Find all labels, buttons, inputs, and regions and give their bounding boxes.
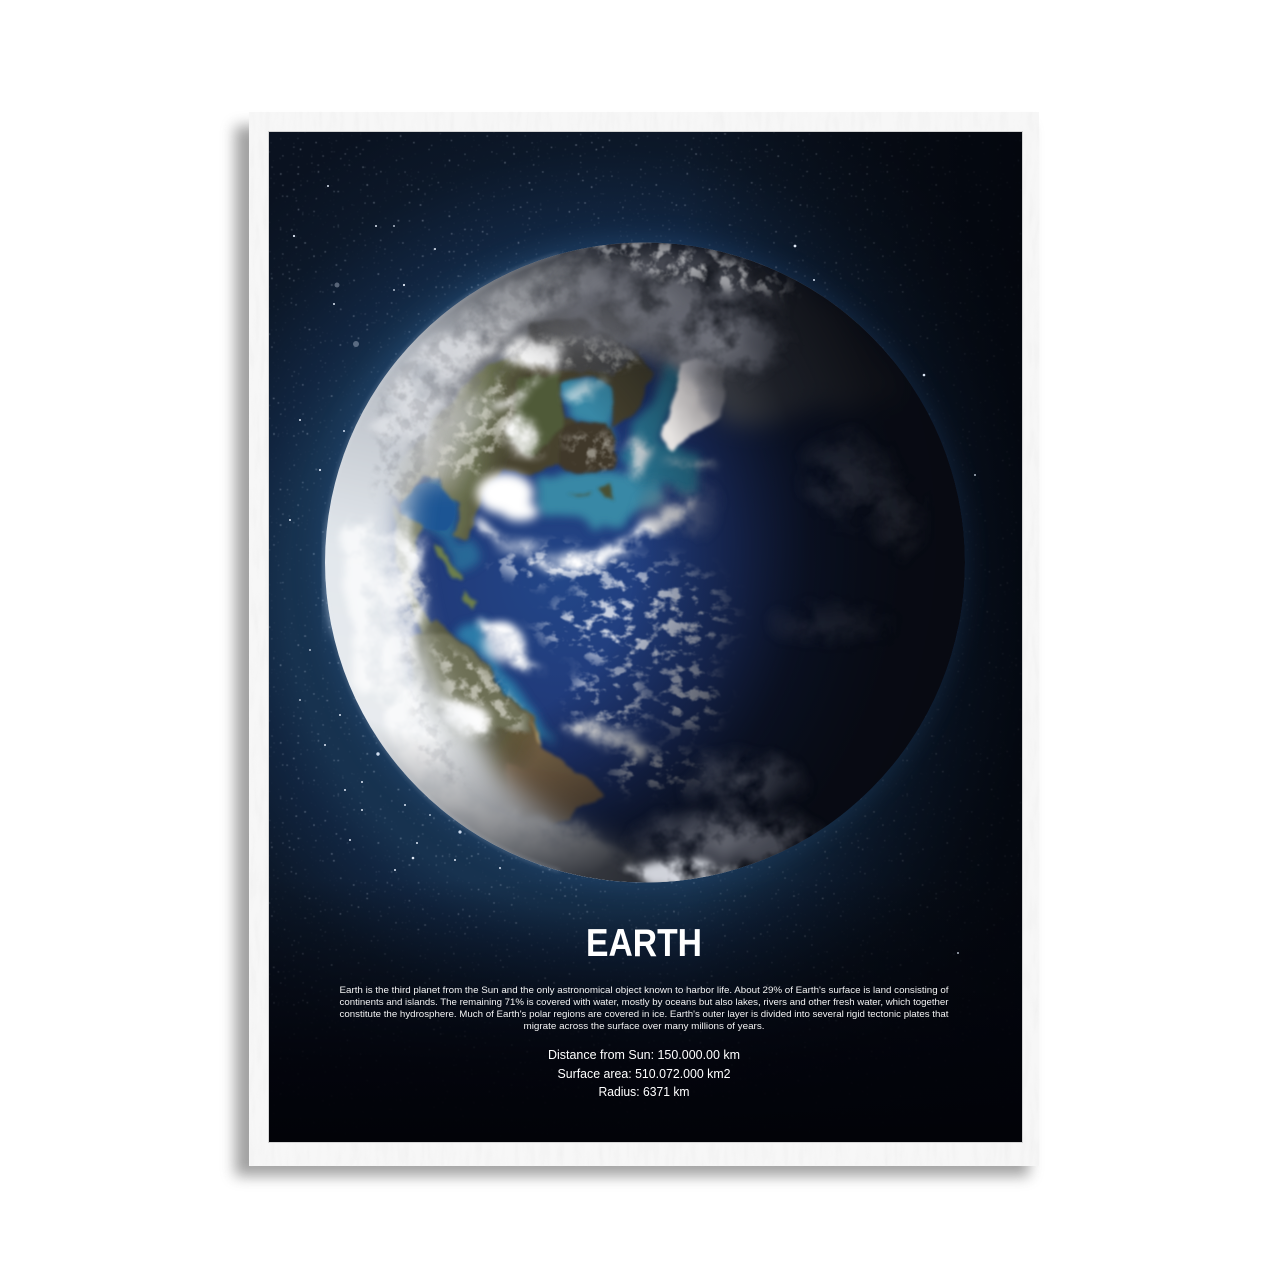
night side shadow [325, 242, 965, 882]
continents [387, 318, 653, 825]
planet statistics: Surface area: 510.072.000 km2 [558, 1067, 731, 1081]
planet Earth [325, 242, 965, 882]
atmosphere glow [318, 240, 962, 884]
ocean base [330, 354, 965, 882]
title: EARTH [586, 922, 702, 965]
bright north crest [549, 209, 811, 315]
sunlit white limb [325, 242, 796, 882]
planet statistics: Distance from Sun: 150.000.00 km [548, 1048, 740, 1062]
northern cloud cover base [340, 238, 900, 500]
limb shadow mottling [373, 274, 570, 782]
description paragraph: migrate across the surface over many millions of years. [524, 1021, 764, 1031]
planet statistics [548, 1048, 740, 1099]
South America [407, 623, 603, 825]
description paragraph: Earth is the third planet from the Sun and the only astronomical object known to harbor life. About 29% of Earth's surface is land consisting of [340, 985, 949, 995]
space background [269, 132, 1022, 1142]
bright storm cores [437, 345, 640, 743]
thick cloud masses [397, 320, 720, 883]
shallow teal seas [403, 360, 700, 750]
thin rim light [325, 254, 560, 871]
limb cloud structure [339, 252, 618, 852]
haze blending land with clouds [409, 317, 640, 772]
land mottling [393, 333, 643, 733]
poster artwork [269, 132, 1055, 1142]
description paragraph [340, 985, 949, 1031]
dim clouds on night side [564, 246, 914, 882]
frame drop shadow [235, 126, 1029, 1176]
description paragraph: continents and islands. The remaining 71% is covered with water, mostly by oceans but also lakes, rivers and other fresh water, which together [340, 997, 948, 1007]
description paragraph: constitute the hydrosphere. Much of Earth's polar regions are covered in ice. Earth's outer layer is divided into several rigid tectonic plates that [340, 1009, 949, 1019]
Gulf deep water [400, 483, 455, 531]
planet statistics: Radius: 6371 km [598, 1085, 690, 1099]
ocean cloud flecks [480, 543, 745, 798]
Greenland ice [661, 360, 725, 453]
North America [387, 318, 653, 630]
star field [289, 185, 976, 954]
white picture frame [249, 112, 1039, 1166]
